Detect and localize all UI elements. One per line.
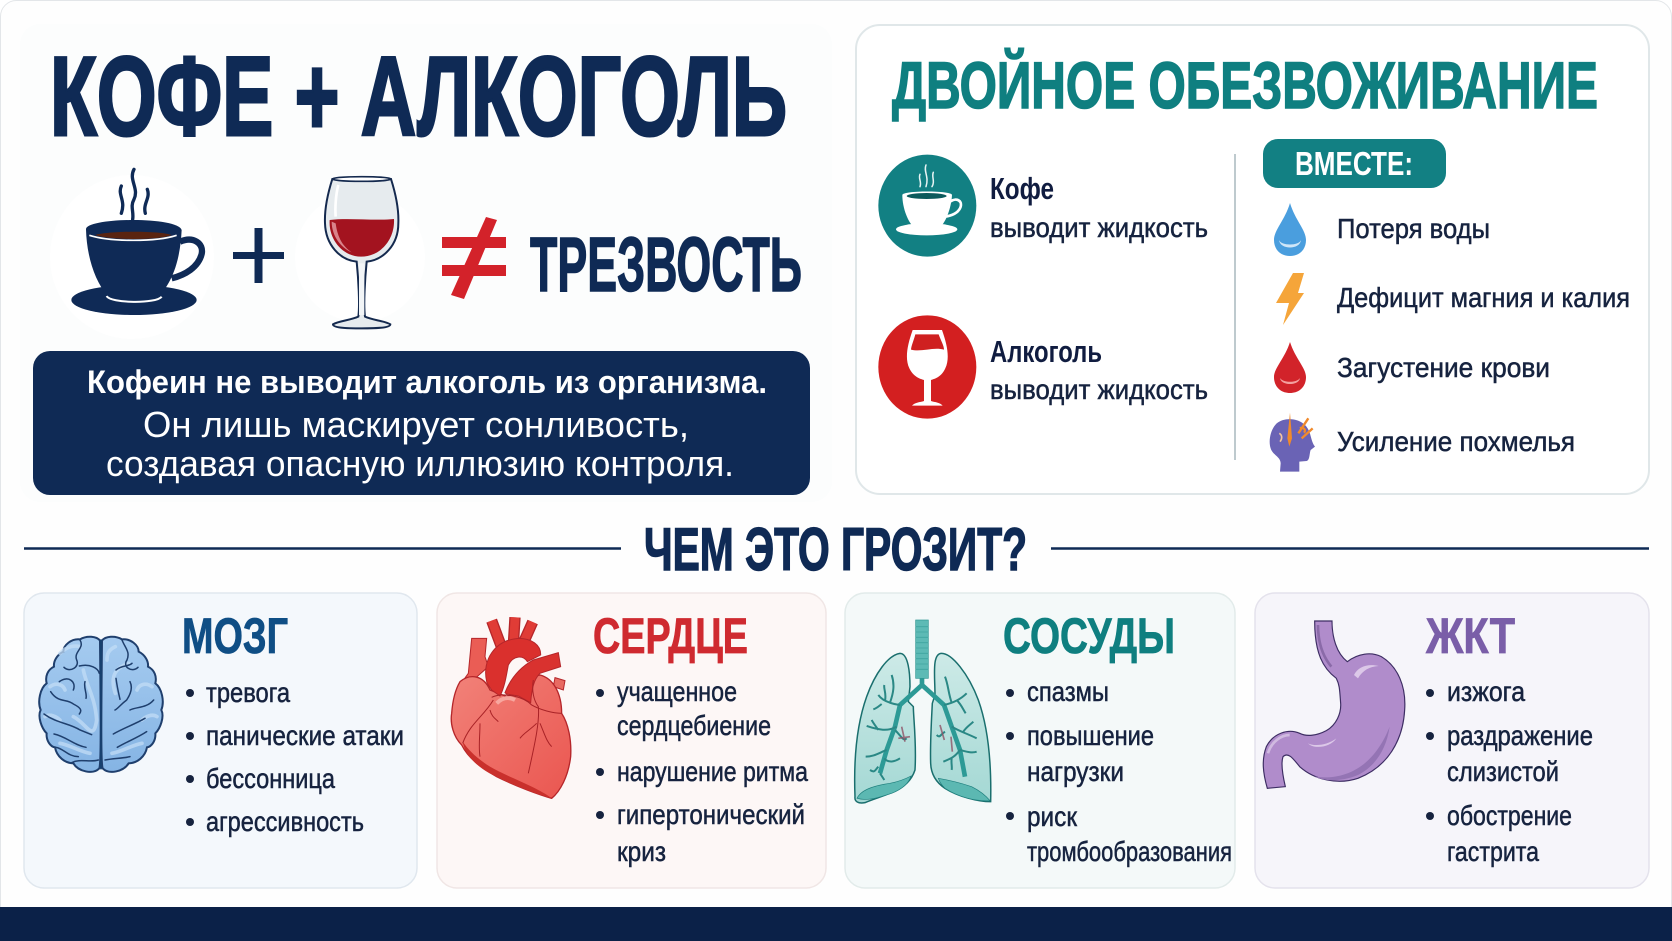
list: слизистой — [1447, 756, 1559, 787]
icon: brain — [39, 637, 163, 772]
list: тромбообразования — [1027, 836, 1232, 867]
list: агрессивность — [206, 806, 364, 837]
badge: together — [1263, 139, 1446, 188]
list: панические атаки — [206, 720, 404, 751]
not equal sign — [442, 217, 506, 299]
alcohol label — [990, 334, 1208, 405]
heading: МОЗГ — [182, 608, 288, 664]
heading: СЕРДЦЕ — [593, 608, 748, 664]
icon: wine glass — [325, 177, 398, 328]
panel: brain — [24, 593, 417, 888]
list: учащенное — [617, 676, 737, 707]
list: гастрита — [1447, 836, 1539, 867]
icon: head with pain — [1270, 413, 1315, 472]
list: повышение — [1027, 720, 1154, 751]
footer band — [0, 907, 1672, 941]
icon: water drop — [1274, 203, 1306, 256]
list: криз — [617, 836, 666, 867]
icon: coffee cup — [71, 169, 202, 315]
icon: lightning — [1276, 273, 1304, 325]
list — [1426, 676, 1593, 867]
list: тревога — [206, 677, 290, 708]
plus sign — [233, 228, 284, 283]
panel: digestive tract — [1255, 593, 1649, 888]
alcohol label: выводит жидкость — [990, 374, 1208, 405]
icon: coffee circle — [878, 155, 976, 257]
panel: coffee plus alcohol — [33, 34, 810, 495]
title: КОФЕ + АЛКОГОЛЬ — [50, 34, 787, 159]
list: изжога — [1447, 676, 1525, 707]
list: обострение — [1447, 800, 1572, 831]
list: спазмы — [1027, 676, 1109, 707]
callout: создавая опасную иллюзию контроля. — [106, 443, 734, 484]
list: сердцебиение — [617, 710, 771, 741]
callout — [33, 351, 810, 495]
coffee label: выводит жидкость — [990, 212, 1208, 243]
callout: Кофеин не выводит алкоголь из организма. — [87, 364, 767, 400]
text: blood thickening: Загустение крови — [1337, 352, 1550, 383]
list: раздражение — [1447, 720, 1593, 751]
icon: stomach — [1263, 621, 1405, 788]
coffee label — [990, 171, 1208, 243]
callout: Он лишь маскирует сонливость, — [143, 404, 689, 445]
text: mineral deficit: Дефицит магния и калия — [1337, 282, 1630, 313]
word: sobriety: ТРЕЗВОСТЬ — [530, 222, 802, 308]
section heading: ЧЕМ ЭТО ГРОЗИТ? — [644, 516, 1027, 583]
icon: lungs — [855, 620, 991, 803]
list: бессонница — [206, 763, 335, 794]
coffee label: Кофе — [990, 171, 1054, 206]
list: нагрузки — [1027, 756, 1124, 787]
list — [596, 676, 808, 867]
icon: blood drop — [1274, 342, 1306, 393]
list: риск — [1027, 801, 1078, 832]
heading: СОСУДЫ — [1003, 608, 1175, 664]
text: worse hangover: Усиление похмелья — [1337, 426, 1575, 457]
panel: heart — [437, 593, 826, 888]
icon: wine circle — [878, 315, 976, 419]
heading: ЖКТ — [1425, 608, 1515, 664]
list: гипертонический — [617, 799, 805, 830]
list — [186, 677, 404, 837]
badge: together: ВМЕСТЕ: — [1295, 145, 1413, 182]
icon: heart — [451, 617, 571, 798]
list — [1006, 676, 1232, 867]
alcohol label: Алкоголь — [990, 334, 1102, 369]
list: нарушение ритма — [617, 756, 808, 787]
text: water loss: Потеря воды — [1337, 213, 1490, 244]
panel: double dehydration — [856, 25, 1649, 494]
panel: vessels — [845, 593, 1235, 888]
